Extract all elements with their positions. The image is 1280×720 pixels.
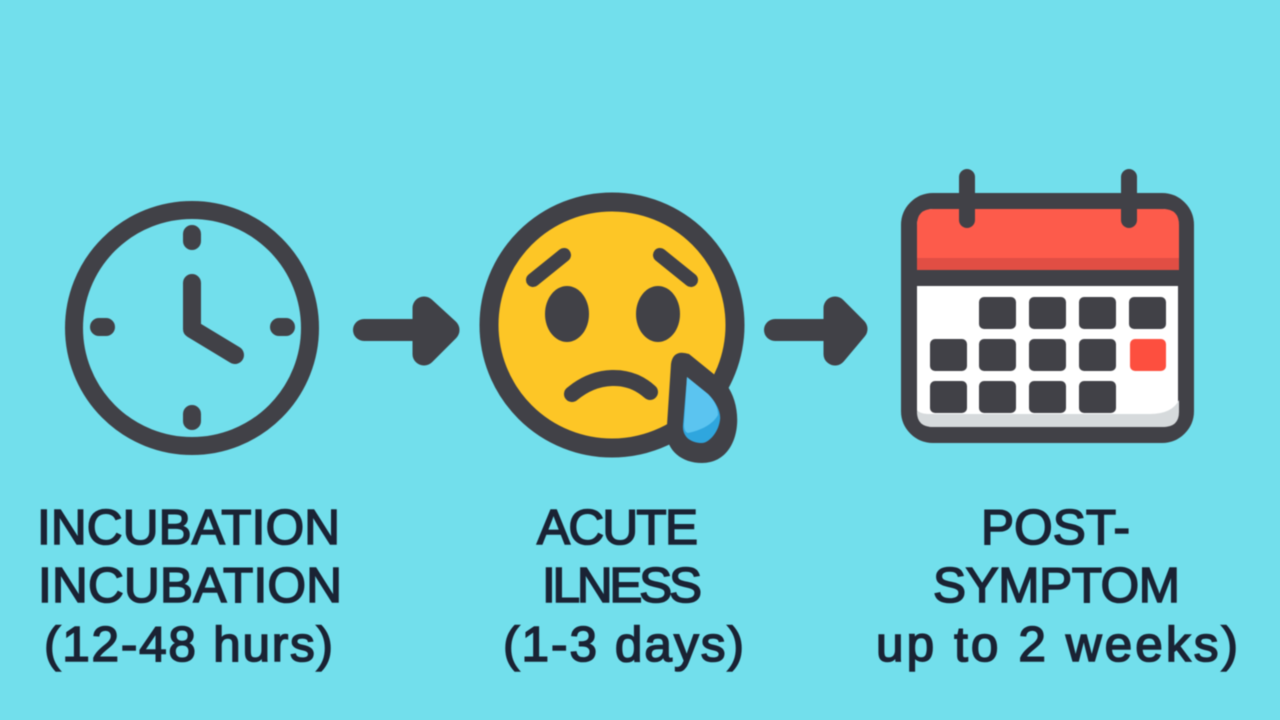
arrow: incubation to acute illness <box>364 308 448 354</box>
label: acute illness: ACUTE <box>537 500 698 555</box>
calendar highlighted day <box>1130 339 1166 371</box>
icon: crying sad face <box>489 202 737 463</box>
icon: clock <box>74 210 310 446</box>
arrow: acute illness to post-symptom <box>775 308 856 354</box>
label: post-symptom: up to 2 weeks) <box>876 617 1238 672</box>
icon: tear drop <box>666 353 737 463</box>
label: incubation: (12-48 hurs) <box>44 617 333 672</box>
label: incubation: INCUBATION <box>37 500 340 555</box>
label: acute illness: ILNESS <box>542 558 702 613</box>
label: post-symptom: POST- <box>981 500 1130 555</box>
label: acute illness: (1-3 days) <box>503 617 744 672</box>
label: post-symptom: SYMPTOM <box>933 558 1180 613</box>
label: incubation: INCUBATION <box>38 558 342 613</box>
label: incubation <box>37 500 342 672</box>
calendar rings <box>959 169 1137 228</box>
icon: calendar <box>909 169 1186 435</box>
calendar day squares <box>930 297 1166 413</box>
label: acute illness <box>503 500 744 672</box>
label: post-symptom <box>876 500 1238 672</box>
